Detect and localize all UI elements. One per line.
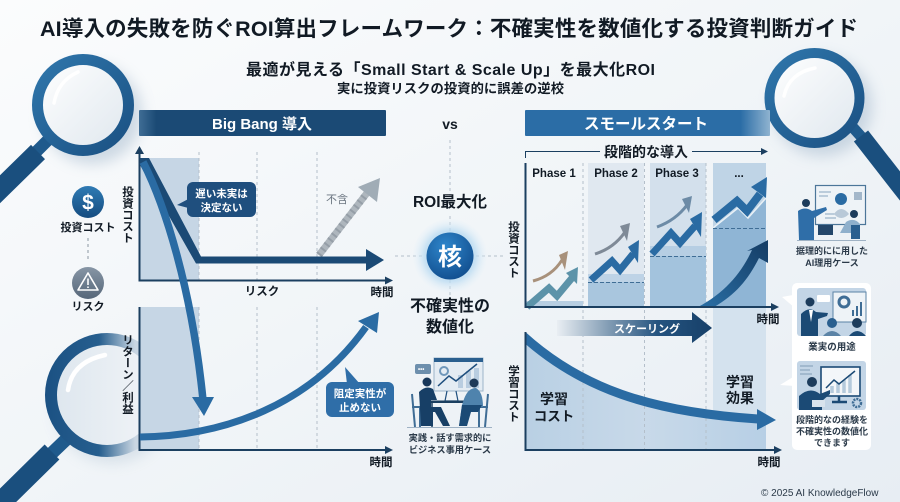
- callout: cost: 決定ない: [200, 201, 242, 214]
- caption: steps: できます: [814, 438, 850, 448]
- phase 3: [650, 168, 706, 307]
- illustration: presenter and board: [797, 186, 866, 240]
- banner: Big Bang: [139, 110, 386, 136]
- hub: ROI core: [395, 140, 505, 336]
- caption: presenter: AI理用ケース: [805, 258, 859, 268]
- label: learning cost: 学習: [540, 391, 568, 407]
- illustration: presentation to audience: [797, 288, 866, 336]
- label: time: 時間: [370, 285, 394, 299]
- callout: return: [326, 367, 394, 417]
- arrow: flat cost: [140, 158, 384, 271]
- icon: magnifier top right: [770, 53, 900, 204]
- y label: 投資コスト: [121, 185, 134, 244]
- arrow: scaling: スケーリング: [614, 322, 680, 336]
- caption: steps: 段階的なの経験を: [796, 414, 868, 425]
- label: phased rollout: 段階的な導入: [604, 144, 688, 160]
- label: learning effect: 学習: [726, 374, 754, 390]
- banner: Big Bang: Big Bang 導入: [212, 115, 312, 133]
- banner: small start: スモールスタート: [584, 115, 708, 133]
- caption: center illustration: 実践・話す需求的に: [409, 432, 491, 443]
- label: time: 時間: [756, 312, 780, 326]
- arrow: steep cost drop: [143, 162, 214, 416]
- panel: use case card: [780, 283, 871, 450]
- arrow: dark scale-up curve: [698, 240, 768, 307]
- banner: small start: [525, 110, 770, 136]
- illustration: analyst with chart: [797, 361, 866, 410]
- label: risk: リスク: [72, 300, 104, 313]
- callout: return: 止めない: [339, 401, 381, 414]
- caption: presenter: 据理的にに用した: [796, 245, 868, 256]
- label: risk axis: リスク: [245, 285, 279, 298]
- callout: cost: [177, 182, 256, 217]
- y label: 学習コスト: [507, 364, 520, 422]
- title: AI導入の失敗を防ぐROI算出フレームワーク：不確実性を数値化する投資判断ガイド: [40, 17, 858, 41]
- label: learning cost: [534, 391, 574, 424]
- copyright: © 2025 AI KnowledgeFlow: [761, 488, 879, 499]
- chart: learning cost: [507, 310, 782, 469]
- icon: magnifier bottom left: [0, 339, 170, 502]
- label: quantify uncertainty: 不確実性の: [410, 296, 490, 315]
- y label: リターン／利益: [121, 334, 134, 414]
- icon: dollar: $: [82, 192, 94, 214]
- label: investment cost: 投資コスト: [60, 220, 116, 234]
- phase 1: Phase 1: [532, 168, 576, 180]
- label: learning effect: 効果: [726, 390, 754, 406]
- label: learning cost: コスト: [534, 409, 574, 424]
- arrow: gray excluded: [319, 178, 380, 255]
- arrow: scaling: [557, 312, 712, 343]
- label: quantify uncertainty: 数値化: [426, 317, 474, 336]
- icon: core circle: 核: [438, 244, 462, 271]
- curve: learning: [522, 335, 776, 430]
- subtitle: 最適が見える「Small Start & Scale Up」を最大化ROI: [246, 60, 655, 79]
- phase 4: ...: [734, 168, 744, 180]
- label: time: 時間: [370, 455, 392, 469]
- vs label: vs: [442, 116, 458, 132]
- curve: return: [140, 312, 379, 437]
- chart: Big Bang cost: [121, 146, 394, 299]
- chart: Big Bang return: [121, 307, 394, 469]
- phase 2: [588, 168, 644, 307]
- phase 1: [526, 168, 583, 307]
- callout: cost: 遅い未実は: [195, 187, 248, 200]
- arrow: gray excluded: 不含: [326, 193, 348, 206]
- illustration: two people at table: •••: [418, 367, 424, 373]
- label: ROI: ROI最大化: [413, 193, 488, 211]
- subtitle: [246, 60, 655, 96]
- label: time: 時間: [758, 455, 780, 469]
- icon: core circle: [413, 219, 487, 293]
- label: quantify uncertainty: [410, 296, 490, 336]
- phase 2: Phase 2: [594, 168, 638, 180]
- caption: presenter: [796, 245, 868, 268]
- caption: uses: 業実の用途: [808, 341, 856, 353]
- phase 3: Phase 3: [655, 168, 699, 180]
- legend: cost and risk icons: [60, 186, 116, 313]
- caption: steps: 不確実性の数値化: [796, 426, 868, 436]
- icon: warning: [72, 267, 104, 299]
- chart: phased investment: [507, 144, 780, 450]
- icon: magnifier top left: [0, 60, 142, 201]
- subtitle: 実に投資リスクの投資的に誤差の逆校: [337, 80, 565, 96]
- caption: center illustration: ビジネス事用ケース: [409, 444, 491, 455]
- illustration: two people at table: [407, 358, 492, 428]
- label: phased rollout: [526, 144, 768, 160]
- label: learning effect: [726, 374, 754, 406]
- caption: center illustration: [409, 432, 491, 455]
- phase 4: [713, 168, 767, 307]
- callout: return: 阻定実性が: [334, 387, 387, 400]
- y label: 投資コスト: [507, 220, 520, 278]
- caption: steps: [796, 414, 868, 448]
